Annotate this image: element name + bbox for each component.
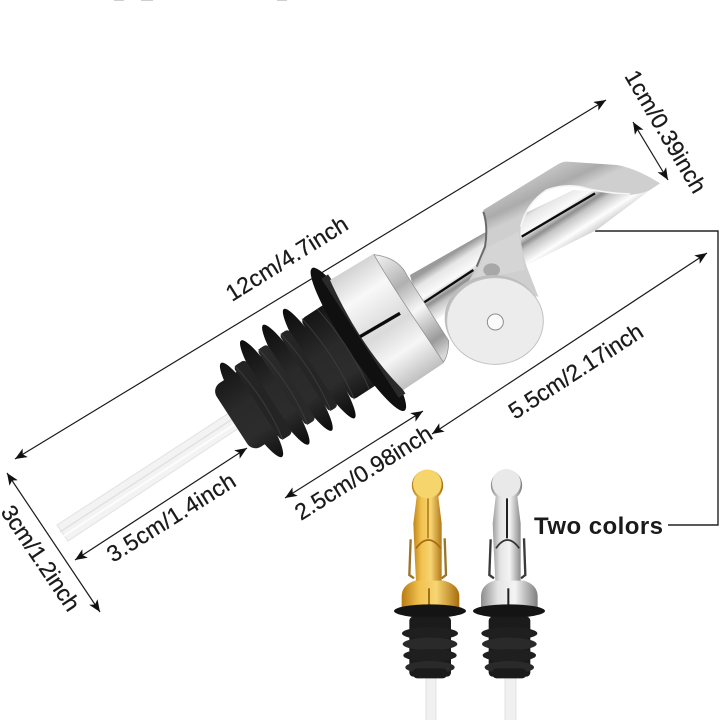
metal collar [330, 254, 449, 390]
dimension labels [0, 65, 712, 616]
spout stem [410, 190, 650, 330]
dimension labels: 2.5cm/0.98inch [290, 420, 437, 525]
tube of the large pourer [57, 411, 242, 541]
dimension labels: 3.5cm/1.4inch [102, 467, 240, 567]
dimension arrows [7, 100, 707, 612]
lever arm [463, 162, 660, 297]
cropped top heading remnants [114, 0, 287, 1]
dimension labels: 1cm/0.39inch [620, 65, 712, 198]
dimension labels: 5.5cm/2.17inch [504, 318, 648, 424]
pivot wheel [445, 263, 543, 364]
small gold pourer [394, 470, 466, 720]
leader line to two colors [595, 231, 718, 525]
small silver pourer [473, 469, 545, 720]
dimension labels: 12cm/4.7inch [221, 211, 353, 306]
black rubber stopper [186, 260, 416, 492]
two colors label: Two colors [534, 513, 663, 540]
